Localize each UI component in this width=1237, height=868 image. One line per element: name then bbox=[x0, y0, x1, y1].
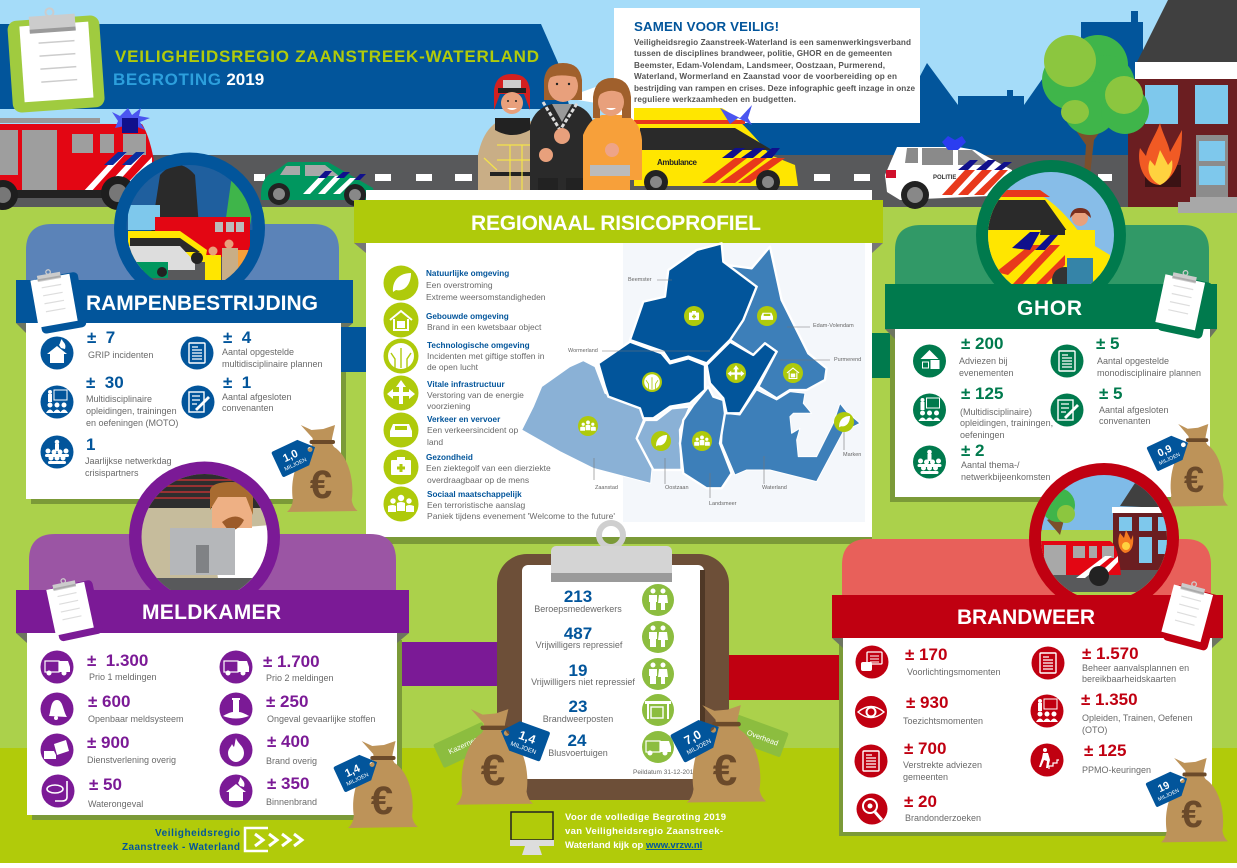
risk legend: Verkeer en vervoer bbox=[427, 415, 501, 424]
stat: prio 2: Prio 2 meldingen bbox=[266, 673, 334, 683]
map: Wormerland bbox=[568, 348, 598, 354]
body shadow bbox=[890, 334, 1205, 502]
stat: waterongeval: ± 50 bbox=[89, 775, 122, 794]
stat: OTO: ± 1.350 bbox=[1081, 690, 1138, 709]
heading: BRANDWEER bbox=[957, 606, 1095, 629]
stat: convenanten: Aantal afgesloten bbox=[1099, 405, 1169, 415]
stat: GRIP incidenten: ± 7 bbox=[87, 328, 115, 347]
connector: brandweer bbox=[729, 655, 843, 700]
stat: convenanten: ± 5 bbox=[1099, 384, 1123, 403]
money bag: 0,9 miljoen: € bbox=[1184, 459, 1204, 500]
money bag: kazernes bbox=[433, 709, 550, 805]
body shadow bbox=[32, 640, 402, 820]
stat: aanvalsplannen: bereikbaarheidskaarten bbox=[1082, 674, 1176, 684]
map: Landsmeer bbox=[709, 501, 737, 507]
body bbox=[26, 323, 341, 499]
map: Edam-Volendam bbox=[813, 323, 854, 329]
body shadow bbox=[31, 328, 346, 504]
stat: MOTO bbox=[40, 373, 178, 428]
stat: adviezen: gemeenten bbox=[903, 772, 948, 782]
background: grass bbox=[0, 207, 1237, 749]
stat: opgestelde plannen: Aantal opgestelde bbox=[222, 347, 294, 357]
text box: samen voor veilig: Veiligheidsregio Zaanstreek-Waterland is een samenwerkingsverband bbox=[634, 38, 911, 47]
text box: samen voor veilig: SAMEN VOOR VEILIG! bbox=[634, 19, 779, 34]
orange vest woman bbox=[583, 78, 642, 190]
map bbox=[522, 243, 865, 522]
stat: opgestelde plannen bbox=[180, 328, 323, 370]
top banner bbox=[0, 24, 570, 109]
people group bbox=[478, 63, 642, 190]
stat: MOTO: opleidingen, trainingen bbox=[86, 406, 177, 416]
money bag: 0,9 miljoen: MILJOEN bbox=[1158, 452, 1181, 467]
stat: voorlichting bbox=[856, 645, 1001, 678]
background: lower grass bbox=[0, 748, 1237, 863]
map: Oostzaan bbox=[665, 485, 689, 491]
stat: aanvalsplannen bbox=[1032, 644, 1189, 684]
stat: binnenbrand: ± 350 bbox=[267, 774, 309, 793]
skyline bbox=[600, 11, 1143, 155]
stat: prio 1 bbox=[40, 650, 157, 684]
body bbox=[27, 633, 397, 815]
clipboard icon bbox=[29, 265, 87, 335]
photo circle bbox=[129, 462, 280, 590]
title: VEILIGHEIDSREGIO ZAANSTREEK-WATERLAND bbox=[115, 47, 539, 66]
stat: adviezen: ± 700 bbox=[904, 739, 946, 758]
connector: rampenbestrijding bbox=[341, 327, 366, 372]
risk legend: Paniek tijdens evenement 'Welcome to the future' bbox=[427, 511, 615, 521]
photo circle bbox=[976, 160, 1126, 284]
text box: samen voor veilig: reguliere werkzaamheden en budgetten. bbox=[634, 95, 796, 104]
police car: POLITIE bbox=[933, 175, 956, 181]
heading: MELDKAMER bbox=[142, 601, 281, 624]
heading: RAMPENBESTRIJDING bbox=[86, 292, 318, 315]
money bag: 1,4 miljoen: 1,4 bbox=[343, 762, 363, 780]
risk legend: Een overstroming bbox=[426, 280, 493, 290]
map: Purmerend bbox=[834, 357, 861, 363]
banner bbox=[885, 284, 1217, 329]
panel: brandweer bbox=[832, 463, 1228, 842]
stat: brandonderzoeken bbox=[856, 792, 981, 824]
stat rows: 24 bbox=[568, 731, 587, 750]
stat rows: Blusvoertuigen bbox=[548, 748, 608, 758]
stat: adviezen: ± 200 bbox=[961, 334, 1003, 353]
map: Zaanstad bbox=[595, 485, 618, 491]
text box: samen voor veilig: Waterland, Wormerland en Zaanstad voor de voorbereiding op en bbox=[634, 72, 897, 81]
money bag: 1,4 miljoen: MILJOEN bbox=[346, 772, 370, 788]
police car bbox=[885, 136, 1012, 209]
risk legend: overdraagbaar op de mens bbox=[427, 475, 529, 485]
stat: monodisciplinaire plannen: Aantal opgestelde bbox=[1097, 356, 1169, 366]
firefighter bbox=[478, 74, 540, 190]
stat: aanvalsplannen: ± 1.570 bbox=[1082, 644, 1139, 663]
heading bar bbox=[354, 200, 883, 243]
logo: Veiligheidsregio bbox=[155, 828, 240, 839]
panel: regional risk profile bbox=[354, 190, 883, 544]
stat: monodisciplinaire plannen: ± 5 bbox=[1096, 334, 1120, 353]
stat: convenanten: convenanten bbox=[222, 403, 274, 413]
stat rows: Brandweerposten bbox=[543, 714, 613, 724]
stat: toezicht bbox=[855, 693, 983, 728]
stat: MOTO: Multidisciplinaire bbox=[86, 394, 152, 404]
stat: PPMO: PPMO-keuringen bbox=[1082, 765, 1151, 775]
stat rows: Beroepsmedewerkers bbox=[534, 604, 622, 614]
clipboard icon bbox=[45, 573, 103, 642]
tab bbox=[895, 225, 1209, 300]
money bag: 1,4 miljoen bbox=[333, 741, 418, 828]
connector: meldkamer bbox=[397, 642, 498, 686]
stat: openbaar meldsysteem: ± 600 bbox=[88, 692, 130, 711]
website callout: van Veiligheidsregio Zaanstreek- bbox=[565, 826, 723, 837]
stat: netwerkdag bbox=[40, 435, 172, 478]
risk legend: de open lucht bbox=[427, 362, 479, 372]
stat: opgestelde plannen: multidisciplinaire plannen bbox=[222, 359, 323, 369]
stat: opgestelde plannen: ± 4 bbox=[223, 328, 252, 347]
speech pointer bbox=[565, 80, 615, 106]
peildatum: Peildatum 31-12-2017 bbox=[633, 769, 697, 776]
text box: samen voor veilig: bestrijding van rampen en crises. Deze infographic geeft inzage in onze bbox=[634, 84, 915, 93]
logo: Zaanstreek - Waterland bbox=[122, 842, 240, 853]
tree bbox=[1042, 35, 1149, 175]
stat: OTO: Opleiden, Trainen, Oefenen bbox=[1082, 713, 1193, 723]
stat: adviezen bbox=[854, 739, 982, 782]
money bag: overhead: Overhead bbox=[746, 728, 780, 748]
money bag: overhead: 7,0 bbox=[682, 727, 704, 748]
stat: aanvalsplannen: Beheer aanvalsplannen en bbox=[1082, 663, 1189, 673]
road markings bbox=[254, 174, 1112, 181]
website callout: Waterland kijk op bbox=[565, 840, 646, 851]
stat: dienstverlening: Dienstverlening overig bbox=[87, 755, 176, 765]
stat: gevaarlijke stoffen: Ongeval gevaarlijke stoffen bbox=[267, 714, 375, 724]
risk legend: Een verkeersincident op bbox=[427, 425, 518, 435]
stat: voorlichting: Voorlichtingsmomenten bbox=[907, 667, 1001, 677]
stat: opleidingen: (Multidisciplinaire) bbox=[960, 407, 1032, 417]
stat: GRIP incidenten: GRIP incidenten bbox=[88, 350, 153, 360]
money bag: 19 miljoen: MILJOEN bbox=[1157, 788, 1180, 803]
money bag: 19 miljoen: 19 bbox=[1156, 780, 1172, 795]
stat: dienstverlening bbox=[40, 733, 176, 766]
risk legend: Sociaal maatschappelijk bbox=[427, 490, 522, 499]
panel: rampenbestrijding bbox=[16, 152, 358, 512]
connector: ghor bbox=[872, 333, 895, 378]
risk legend: Gezondheid bbox=[426, 453, 473, 462]
stat rows: Vrijwilligers niet repressief bbox=[531, 677, 635, 687]
stat: brand overig: Brand overig bbox=[266, 756, 317, 766]
money bag: 0,9 miljoen: 0,9 bbox=[1156, 443, 1174, 460]
logo bbox=[122, 828, 302, 853]
map: Beemster bbox=[628, 277, 652, 283]
risk legend: Brand in een kwetsbaar object bbox=[427, 322, 542, 332]
stat: bijeenkomsten: Aantal thema-/ bbox=[961, 460, 1020, 470]
stat: OTO: (OTO) bbox=[1082, 725, 1107, 735]
risk legend: Verstoring van de energie bbox=[427, 390, 524, 400]
stat: netwerkdag: 1 bbox=[86, 435, 95, 454]
clipboard icon bbox=[1159, 577, 1223, 651]
stat: OTO bbox=[1030, 690, 1193, 735]
money bag: kazernes: € bbox=[481, 746, 505, 795]
stat: brand overig bbox=[220, 732, 317, 766]
stat: waterongeval: Waterongeval bbox=[88, 799, 143, 809]
map: Marken bbox=[843, 452, 861, 458]
body shadow bbox=[839, 640, 1207, 836]
mayor bbox=[530, 63, 594, 190]
stat: opleidingen bbox=[913, 384, 1053, 440]
fire truck bbox=[0, 108, 157, 210]
stat: PPMO: ± 125 bbox=[1084, 741, 1126, 760]
icon: monitor bbox=[510, 812, 554, 855]
stat: dienstverlening: ± 900 bbox=[87, 733, 129, 752]
risk legend: Een terroristische aanslag bbox=[427, 500, 526, 510]
body bbox=[843, 638, 1212, 832]
photo circle bbox=[114, 152, 265, 280]
stat: bijeenkomsten: netwerkbijeenkomsten bbox=[961, 472, 1051, 482]
money bag: overhead bbox=[670, 705, 789, 803]
stat: convenanten bbox=[182, 373, 292, 418]
money bag: overhead: € bbox=[713, 746, 737, 795]
road bbox=[0, 155, 1135, 207]
stat: bijeenkomsten bbox=[913, 441, 1051, 482]
stat: convenanten: convenanten bbox=[1099, 416, 1151, 426]
website callout: Voor de volledige Begroting 2019 bbox=[565, 812, 726, 823]
tab bbox=[26, 224, 339, 300]
stat: prio 2 bbox=[220, 650, 334, 684]
stat: adviezen: evenementen bbox=[959, 368, 1014, 378]
risk legend: Technologische omgeving bbox=[427, 341, 530, 350]
stat: convenanten: Aantal afgesloten bbox=[222, 392, 292, 402]
stat rows: 19 bbox=[569, 661, 587, 680]
stat: PPMO bbox=[1030, 741, 1151, 776]
stat rows: 23 bbox=[569, 697, 587, 716]
title bbox=[113, 47, 539, 89]
icon: clipboard bbox=[6, 5, 105, 113]
stat: brand overig: ± 400 bbox=[267, 732, 309, 751]
clipboard icon bbox=[1154, 267, 1215, 339]
map: Waterland bbox=[762, 485, 787, 491]
stat rows bbox=[531, 587, 635, 758]
risk legend: Vitale infrastructuur bbox=[427, 380, 505, 389]
background: sky bbox=[0, 0, 1237, 207]
stat: bijeenkomsten: ± 2 bbox=[961, 441, 985, 460]
banner bbox=[16, 590, 409, 633]
title: BEGROTING 2019 bbox=[113, 70, 264, 89]
money bag: 1,0 miljoen: MILJOEN bbox=[284, 457, 308, 473]
money bag: 1,0 miljoen: 1,0 bbox=[281, 448, 300, 465]
money bag: kazernes: Kazernes bbox=[447, 735, 480, 756]
stat: prio 1: Prio 1 meldingen bbox=[89, 672, 157, 682]
website callout: www.vrzw.nl bbox=[645, 840, 702, 851]
stat: prio 1: ± 1.300 bbox=[87, 651, 148, 670]
central clipboard bbox=[497, 523, 729, 800]
house on fire bbox=[1128, 0, 1237, 213]
stat: opleidingen: oefeningen bbox=[960, 430, 1005, 440]
risk legend: Natuurlijke omgeving bbox=[426, 269, 509, 278]
stat: openbaar meldsysteem: Openbaar meldsysteem bbox=[88, 714, 184, 724]
stat: prio 2: ± 1.700 bbox=[263, 652, 320, 671]
money bag: 1,4 miljoen: € bbox=[371, 779, 393, 823]
photo circle bbox=[1029, 463, 1179, 595]
stat: brandonderzoeken: Brandonderzoeken bbox=[905, 813, 981, 823]
money bag: 19 miljoen: € bbox=[1181, 794, 1203, 836]
heading: GHOR bbox=[1017, 297, 1082, 320]
body bbox=[895, 329, 1210, 497]
stat: GRIP incidenten bbox=[40, 328, 153, 370]
stat rows: 487 bbox=[564, 624, 592, 643]
stat: convenanten bbox=[1050, 384, 1169, 426]
risk legend: voorziening bbox=[427, 401, 471, 411]
stat: adviezen bbox=[913, 334, 1014, 378]
text box: samen voor veilig bbox=[614, 8, 920, 123]
stat: monodisciplinaire plannen: monodisciplinaire plannen bbox=[1097, 368, 1201, 378]
green car bbox=[261, 162, 375, 206]
stat: convenanten: ± 1 bbox=[223, 373, 251, 392]
stat: MOTO: ± 30 bbox=[86, 373, 124, 392]
stat: toezicht: ± 930 bbox=[906, 693, 948, 712]
banner bbox=[832, 595, 1223, 638]
tab bbox=[29, 534, 396, 610]
risk legend: Extreme weersomstandigheden bbox=[426, 292, 546, 302]
text box: samen voor veilig: tussen de disciplines brandweer, politie, GHOR en de gemeenten bbox=[634, 49, 892, 58]
money bag: kazernes: 1,4 bbox=[517, 728, 538, 747]
risk legend: land bbox=[427, 437, 443, 447]
stat: toezicht: Toezichtsmomenten bbox=[903, 716, 983, 726]
stat: openbaar meldsysteem bbox=[40, 692, 184, 726]
people and asset icons bbox=[642, 584, 674, 763]
stat: binnenbrand bbox=[220, 774, 317, 808]
stat: gevaarlijke stoffen: ± 250 bbox=[266, 692, 308, 711]
risk legend: Incidenten met giftige stoffen in bbox=[427, 351, 545, 361]
stat: opleidingen: opleidingen, trainingen, bbox=[960, 418, 1053, 428]
stat: brandonderzoeken: ± 20 bbox=[904, 792, 937, 811]
money bag: 1,0 miljoen bbox=[271, 425, 358, 512]
ambulance: Ambulance bbox=[657, 158, 698, 167]
ambulance bbox=[634, 105, 798, 194]
stat: adviezen: Adviezen bij bbox=[959, 356, 1008, 366]
money bag: overhead: MILJOEN bbox=[686, 738, 712, 757]
tab bbox=[842, 539, 1211, 615]
risk legend: Een ziektegolf van een dierziekte bbox=[426, 463, 551, 473]
risk legend: Gebouwde omgeving bbox=[426, 312, 509, 321]
money bag: 19 miljoen bbox=[1145, 758, 1228, 842]
text box: samen voor veilig: Beemster, Edam-Volendam, Landsmeer, Oostzaan, Purmerend, bbox=[634, 61, 885, 70]
banner bbox=[16, 280, 353, 323]
money bag: 0,9 miljoen bbox=[1146, 424, 1228, 507]
stat: monodisciplinaire plannen bbox=[1050, 334, 1201, 378]
stat: gevaarlijke stoffen bbox=[220, 692, 375, 726]
heading: REGIONAAL RISICOPROFIEL bbox=[471, 212, 761, 235]
risk legend bbox=[384, 266, 615, 522]
panel: meldkamer bbox=[16, 462, 418, 828]
stat: netwerkdag: Jaarlijkse netwerkdag bbox=[85, 456, 172, 466]
stat: netwerkdag: crisispartners bbox=[85, 468, 139, 478]
stat rows: Vrijwilligers repressief bbox=[536, 640, 623, 650]
money bag: kazernes: MILJOEN bbox=[509, 740, 537, 756]
stat: binnenbrand: Binnenbrand bbox=[266, 797, 317, 807]
stat: MOTO: en oefeningen (MOTO) bbox=[86, 418, 178, 428]
stat rows: 213 bbox=[564, 587, 592, 606]
stat: opleidingen: ± 125 bbox=[961, 384, 1003, 403]
stat: voorlichting: ± 170 bbox=[905, 645, 947, 664]
stat: waterongeval bbox=[42, 774, 143, 809]
stat: adviezen: Verstrekte adviezen bbox=[903, 760, 982, 770]
panel: ghor bbox=[885, 160, 1228, 507]
money bag: 1,0 miljoen: € bbox=[310, 463, 332, 507]
